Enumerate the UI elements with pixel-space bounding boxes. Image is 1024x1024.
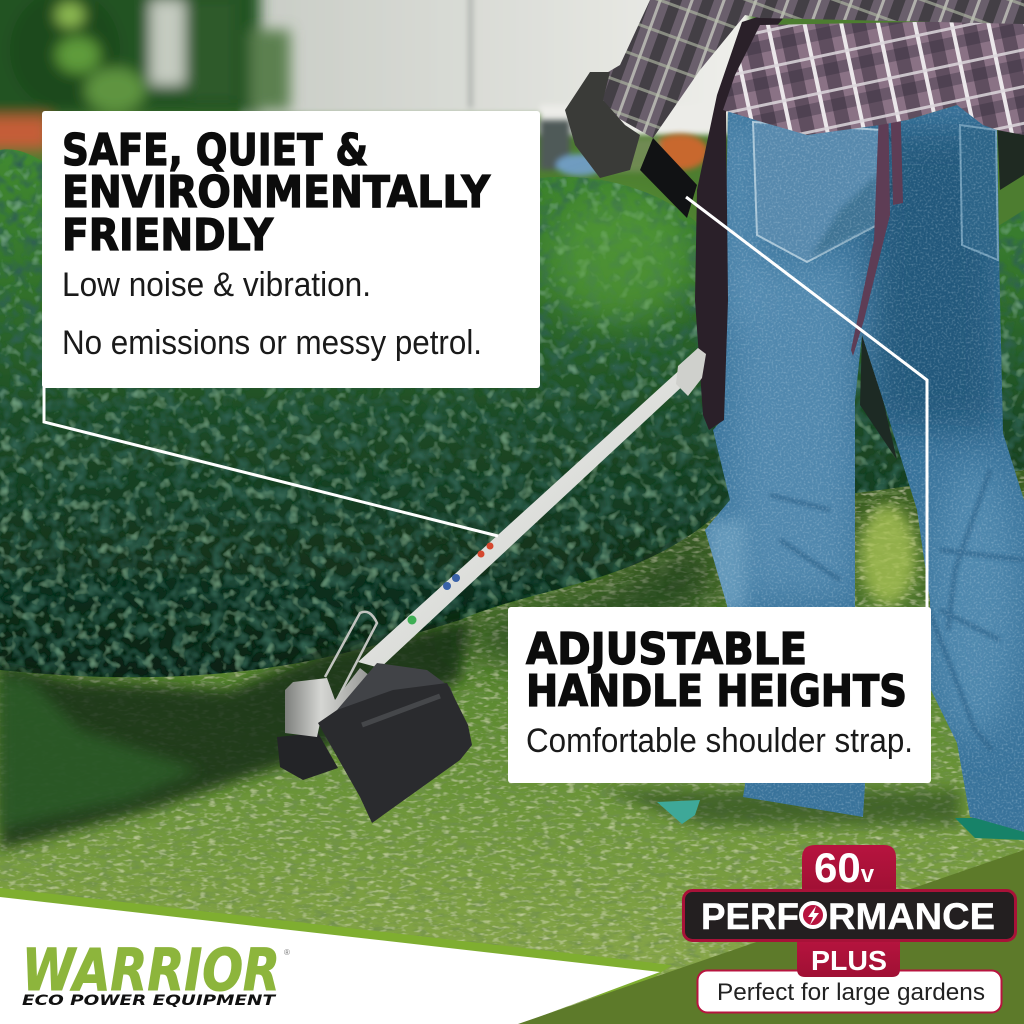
badge: 60v tab: 60v (814, 844, 875, 891)
text: shoulder strap: Comfortable shoulder strap. (526, 722, 913, 760)
apron (695, 5, 795, 430)
right shoulder shade (997, 120, 1024, 190)
hedge sunlit crown (545, 195, 695, 325)
person (565, 0, 1024, 840)
heading: safe quiet: FRIENDLY (62, 210, 274, 261)
logo: warrior: WARRIOR (22, 936, 280, 1004)
left pocket (753, 122, 883, 262)
glove (565, 72, 640, 178)
shaft (358, 356, 702, 668)
motor head (285, 668, 375, 737)
badge: 60v performance plus (684, 844, 1016, 1012)
badge: plus tab (797, 938, 900, 977)
heading: adjustable (526, 624, 907, 717)
jeans folds (770, 470, 1024, 750)
footer: dark green wedge (518, 850, 1024, 1024)
badge: tagline box: Perfect for large gardens (717, 979, 985, 1006)
background trees (0, 0, 290, 150)
footer band: light green (0, 888, 672, 1000)
callout leader: handle to panel (686, 197, 927, 610)
background wall (240, 0, 750, 135)
badge: performance bar: RMANCE (828, 896, 995, 937)
logo: warrior: ® (284, 948, 290, 957)
right pocket (960, 125, 998, 260)
dark gap between legs (860, 335, 897, 460)
flowers behind hedge (540, 120, 708, 176)
denim grain (700, 100, 1024, 840)
strap (851, 85, 903, 356)
heading: safe quiet: SAFE, QUIET & (62, 125, 368, 176)
panel: adjustable handle heights (508, 607, 931, 783)
heading: adjustable: ADJUSTABLE (526, 624, 807, 675)
badge: performance bar: PERF (701, 896, 799, 937)
trimmer (277, 348, 706, 823)
text: no emissions: No emissions or messy petrol. (62, 324, 482, 362)
guard face (318, 683, 472, 823)
panel: safe, quiet and environmentally friendly (42, 111, 540, 388)
guard upper (337, 663, 470, 770)
badge: performance bar (684, 890, 1016, 940)
logo: warrior: ECO POWER EQUIPMENT (22, 993, 277, 1009)
heading: safe quiet: ENVIRONMENTALLY (62, 167, 491, 218)
lawn (0, 470, 1024, 1024)
shaft decals (408, 542, 494, 624)
badge: 60v tab (802, 844, 896, 892)
heading: safe quiet (62, 125, 491, 261)
heading: adjustable: HANDLE HEIGHTS (526, 666, 907, 717)
lawn shading (0, 505, 960, 850)
jeans (700, 100, 1024, 840)
handle coupling (676, 348, 706, 396)
badge: plus tab: PLUS (811, 945, 887, 976)
footer: white wedge (0, 897, 660, 1024)
spool (277, 733, 338, 780)
handle (640, 138, 697, 218)
plaid shirt body (723, 20, 1024, 135)
badge: tagline box (698, 970, 1002, 1012)
callout leader: hedge to shaft (44, 386, 498, 536)
boots (657, 800, 700, 824)
text: low noise: Low noise & vibration. (62, 266, 371, 304)
hedge (0, 149, 1024, 682)
shirt yoke (603, 0, 1024, 138)
wire guard (325, 612, 377, 717)
